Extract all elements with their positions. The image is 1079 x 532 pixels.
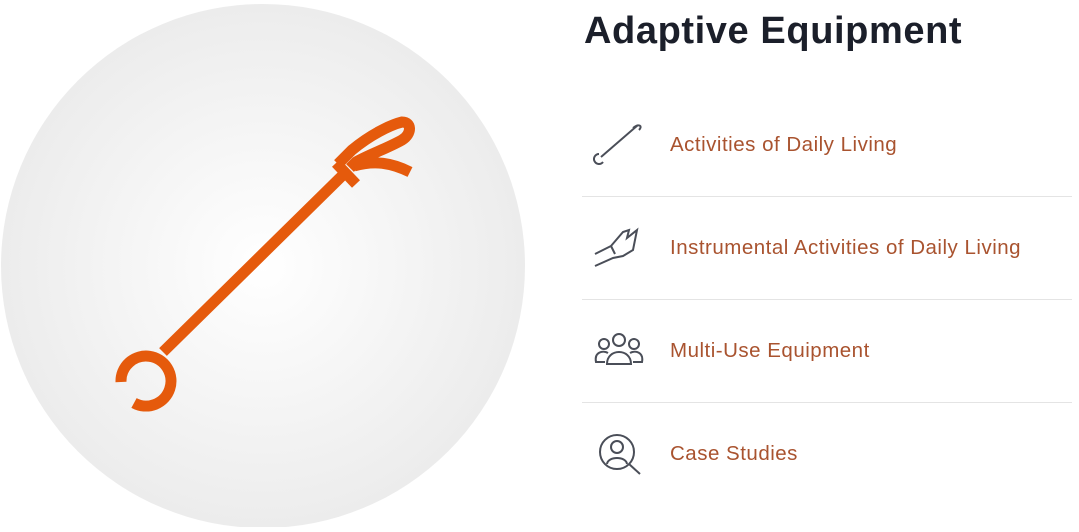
item: Case Studies: Case Studies [670, 442, 798, 465]
icon: reacher [121, 122, 410, 406]
item: Multi-Use: Multi-Use Equipment [670, 339, 870, 362]
item: ADL: Activities of Daily Living [670, 133, 897, 156]
item: IADL: Instrumental Activities of Daily Living [670, 236, 1021, 259]
icon: hand [594, 228, 638, 267]
icon: reacher small [593, 124, 642, 165]
title: Adaptive Equipment [584, 10, 962, 52]
icon: case study [599, 434, 641, 475]
panel: illustration circle [1, 4, 525, 527]
icon: group [594, 333, 644, 365]
